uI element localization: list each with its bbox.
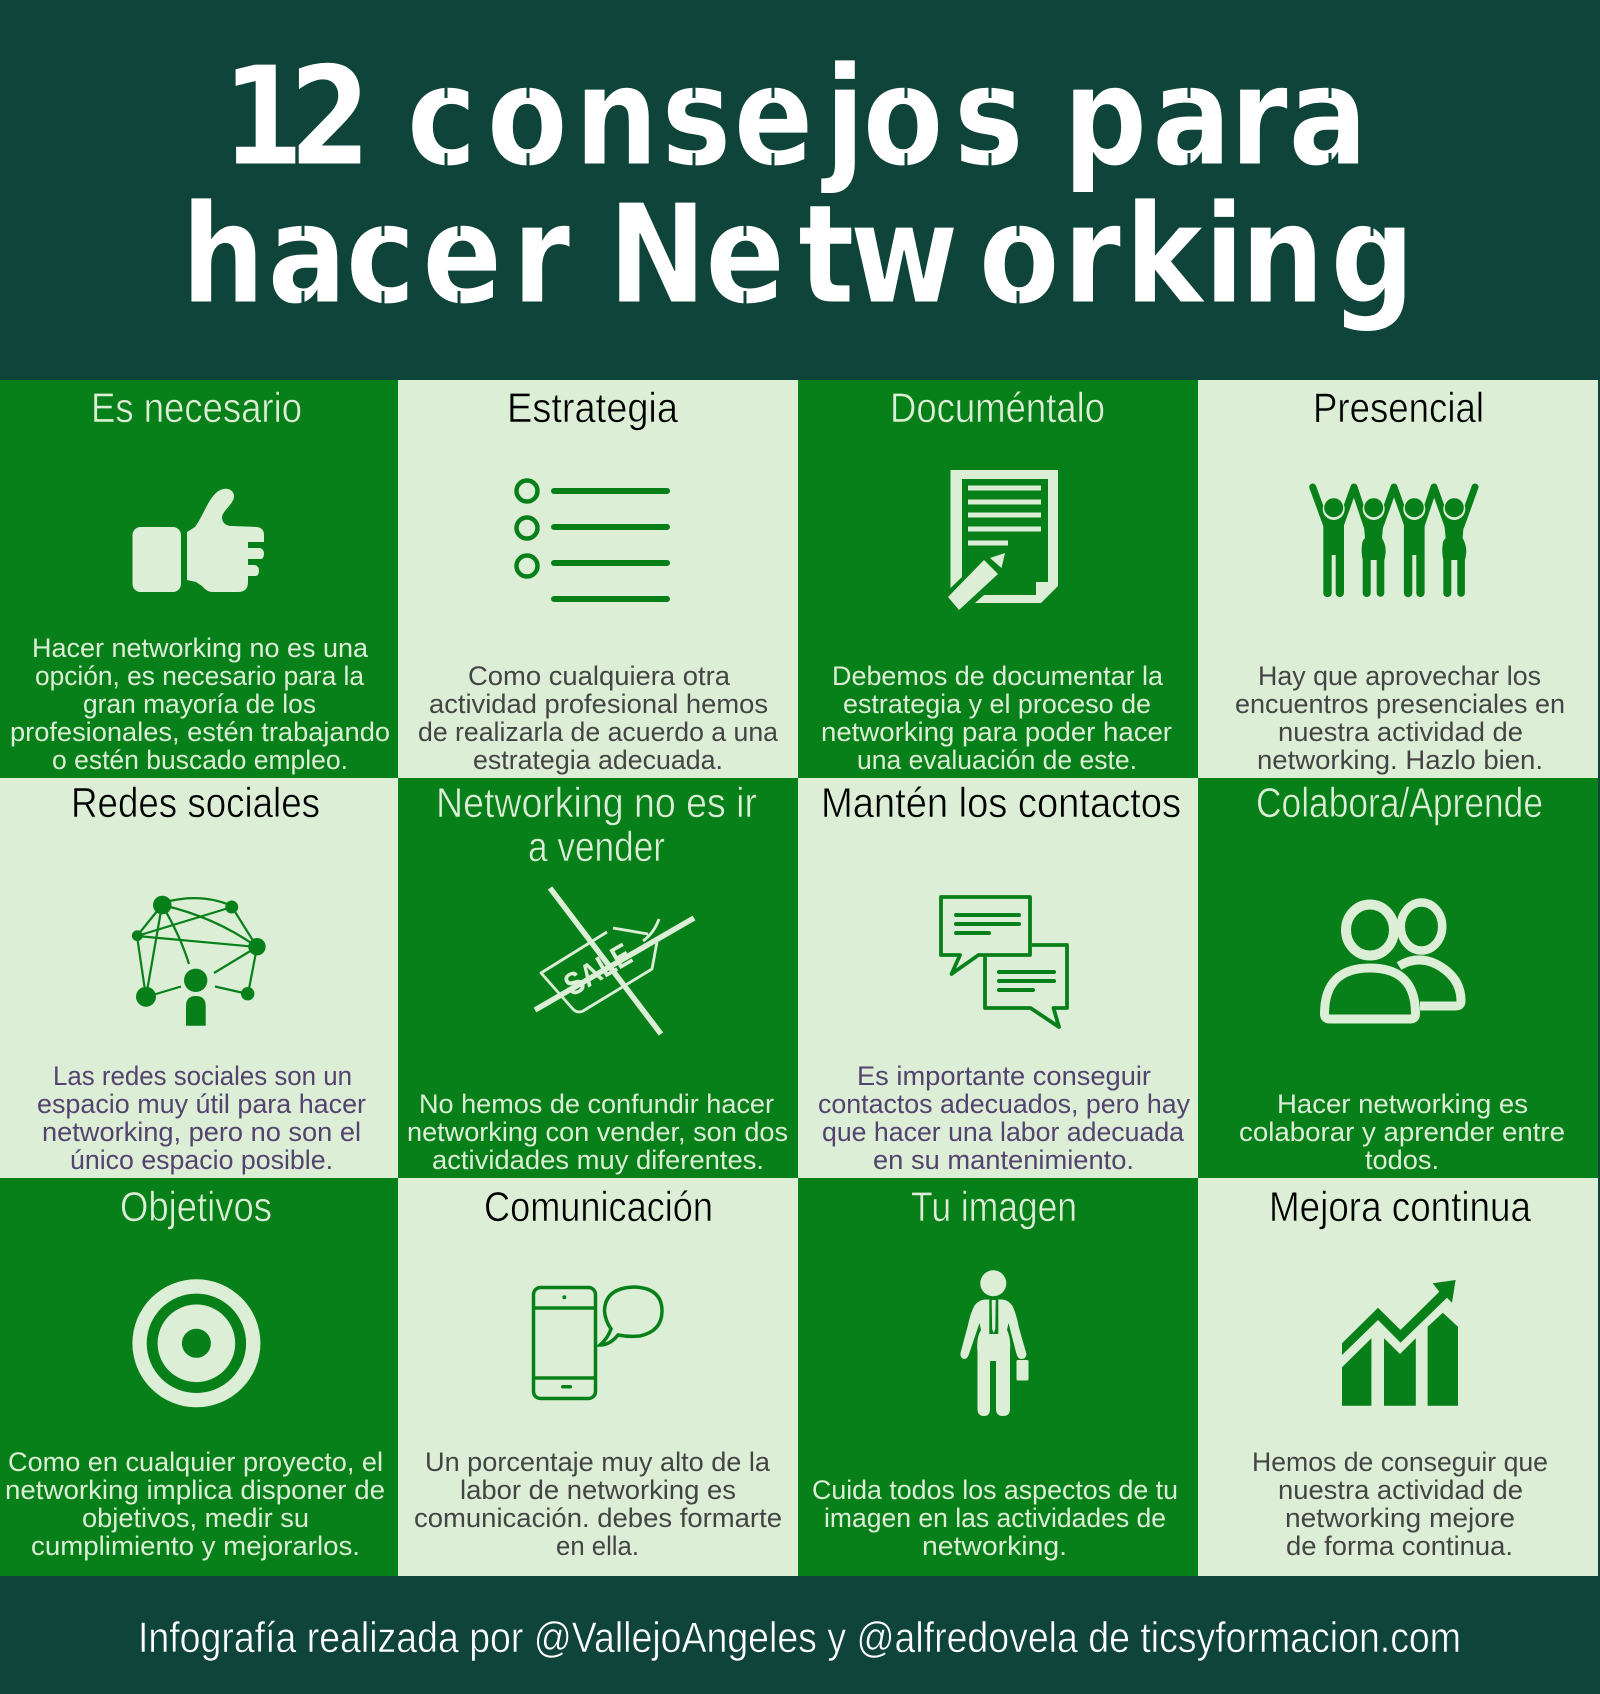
body text: nuestra actividad de — [1278, 717, 1523, 747]
body text: networking, pero no son el — [42, 1117, 361, 1147]
body text: que hacer una labor adecuada — [822, 1117, 1185, 1147]
panel: Networking no es ir a vender — [398, 778, 798, 1178]
body text: estrategia y el proceso de — [843, 689, 1151, 719]
icon: businessman with briefcase — [960, 1270, 1028, 1416]
heading: Mantén los contactos: Mantén los contactos — [821, 779, 1181, 826]
body text: de forma continua. — [1286, 1531, 1513, 1561]
body text: colaborar y aprender entre — [1239, 1117, 1565, 1147]
icon: crossed out sale tag — [535, 888, 694, 1034]
body text: Hacer networking no es una — [32, 633, 369, 663]
heading: Comunicación: Comunicación — [484, 1183, 713, 1230]
body text: actividad profesional hemos — [429, 689, 768, 719]
body text — [1252, 1447, 1548, 1561]
body text: comunicación. debes formarte — [414, 1503, 782, 1533]
icon: document and pencil — [948, 470, 1058, 610]
body text — [10, 633, 390, 775]
body text: networking para poder hacer — [821, 717, 1172, 747]
heading: Es necesario: Es necesario — [91, 384, 302, 431]
heading: Mejora continua: Mejora continua — [1269, 1183, 1532, 1230]
heading: Networking no es ir a vender: a vender — [528, 823, 665, 870]
body text: en ella. — [556, 1531, 639, 1561]
body text — [812, 1475, 1178, 1561]
body text: o estén buscado empleo. — [52, 745, 348, 775]
body text: objetivos, medir su — [82, 1503, 309, 1533]
heading: Redes sociales: Redes sociales — [71, 779, 320, 826]
body text: actividades muy diferentes. — [432, 1145, 764, 1175]
title: hacer Networking — [181, 175, 1415, 335]
body text: estrategia adecuada. — [473, 745, 723, 775]
panel: Redes sociales — [0, 778, 398, 1178]
body text: Hay que aprovechar los — [1258, 661, 1541, 691]
panel: Mantén los contactos — [798, 778, 1198, 1178]
body text: Como en cualquier proyecto, el — [8, 1447, 383, 1477]
body text: gran mayoría de los — [83, 689, 316, 719]
icon: checklist — [516, 480, 667, 599]
body text — [407, 1089, 788, 1175]
body text: todos. — [1365, 1145, 1439, 1175]
body text: encuentros presenciales en — [1235, 689, 1565, 719]
body text: labor de networking es — [460, 1475, 736, 1505]
body text: opción, es necesario para la — [35, 661, 365, 691]
body text: Es importante conseguir — [857, 1061, 1151, 1091]
panel: Mejora continua — [1198, 1178, 1598, 1576]
body text: networking mejore — [1285, 1503, 1515, 1533]
body text: espacio muy útil para hacer — [37, 1089, 366, 1119]
body text — [1235, 661, 1565, 775]
body text: en su mantenimiento. — [873, 1145, 1134, 1175]
heading: Objetivos: Objetivos — [120, 1183, 272, 1230]
body text: imagen en las actividades de — [824, 1503, 1166, 1533]
heading: Estrategia: Estrategia — [507, 384, 679, 431]
body text: contactos adecuados, pero hay — [818, 1089, 1190, 1119]
body text: No hemos de confundir hacer — [419, 1089, 774, 1119]
body text — [5, 1447, 385, 1561]
icon: social network — [132, 896, 266, 1026]
body text: networking con vender, son dos — [407, 1117, 788, 1147]
body text — [414, 1447, 782, 1561]
body text: Cuida todos los aspectos de tu — [812, 1475, 1178, 1505]
body text: Debemos de documentar la — [832, 661, 1164, 691]
panel: Colabora/Aprende — [1198, 778, 1598, 1178]
body text: Las redes sociales son un — [53, 1061, 352, 1091]
panel: Comunicación — [398, 1178, 798, 1576]
body text — [37, 1061, 366, 1175]
body text: Hacer networking es — [1277, 1089, 1528, 1119]
icon: two people outlines — [1324, 902, 1461, 1019]
icon: thumbs up — [132, 489, 264, 592]
body text: networking. Hazlo bien. — [1257, 745, 1543, 775]
body text: una evaluación de este. — [857, 745, 1137, 775]
panel: Presencial — [1198, 380, 1598, 778]
body text: networking. — [922, 1531, 1067, 1561]
icon: phone with speech bubble — [534, 1287, 662, 1398]
heading: Networking no es ir a vender — [436, 779, 757, 870]
panel: Es necesario — [0, 380, 398, 778]
body text: cumplimiento y mejorarlos. — [31, 1531, 360, 1561]
body text — [418, 661, 779, 775]
body text — [818, 1061, 1190, 1175]
panel: Estrategia — [398, 380, 798, 778]
panel: Documéntalo — [798, 380, 1198, 778]
body text: Hemos de conseguir que — [1252, 1447, 1548, 1477]
heading: Colabora/Aprende: Colabora/Aprende — [1256, 779, 1543, 826]
body text — [821, 661, 1172, 775]
icon: target — [132, 1279, 260, 1407]
icon: people holding hands up — [1313, 487, 1475, 597]
body text: único espacio posible. — [70, 1145, 333, 1175]
heading: Networking no es ir a vender: Networking no es ir — [436, 779, 757, 826]
body text: Un porcentaje muy alto de la — [425, 1447, 771, 1477]
body text: profesionales, estén trabajando — [10, 717, 390, 747]
icon: crossed out sale tag: SALE — [558, 936, 638, 1003]
heading: Presencial: Presencial — [1313, 384, 1484, 431]
heading: Tu imagen: Tu imagen — [911, 1183, 1077, 1230]
body text — [1239, 1089, 1565, 1175]
panel: Tu imagen — [798, 1178, 1198, 1576]
body text: networking implica disponer de — [5, 1475, 385, 1505]
heading: Documéntalo: Documéntalo — [890, 384, 1105, 431]
title — [181, 37, 1415, 335]
title: 12 consejos para — [222, 37, 1368, 197]
icon: chat bubbles — [941, 897, 1067, 1027]
panel: Objetivos — [0, 1178, 398, 1576]
icon: growth chart with arrow — [1342, 1280, 1458, 1406]
body text: nuestra actividad de — [1278, 1475, 1523, 1505]
body text: de realizarla de acuerdo a una — [418, 717, 779, 747]
body text: Como cualquiera otra — [468, 661, 731, 691]
